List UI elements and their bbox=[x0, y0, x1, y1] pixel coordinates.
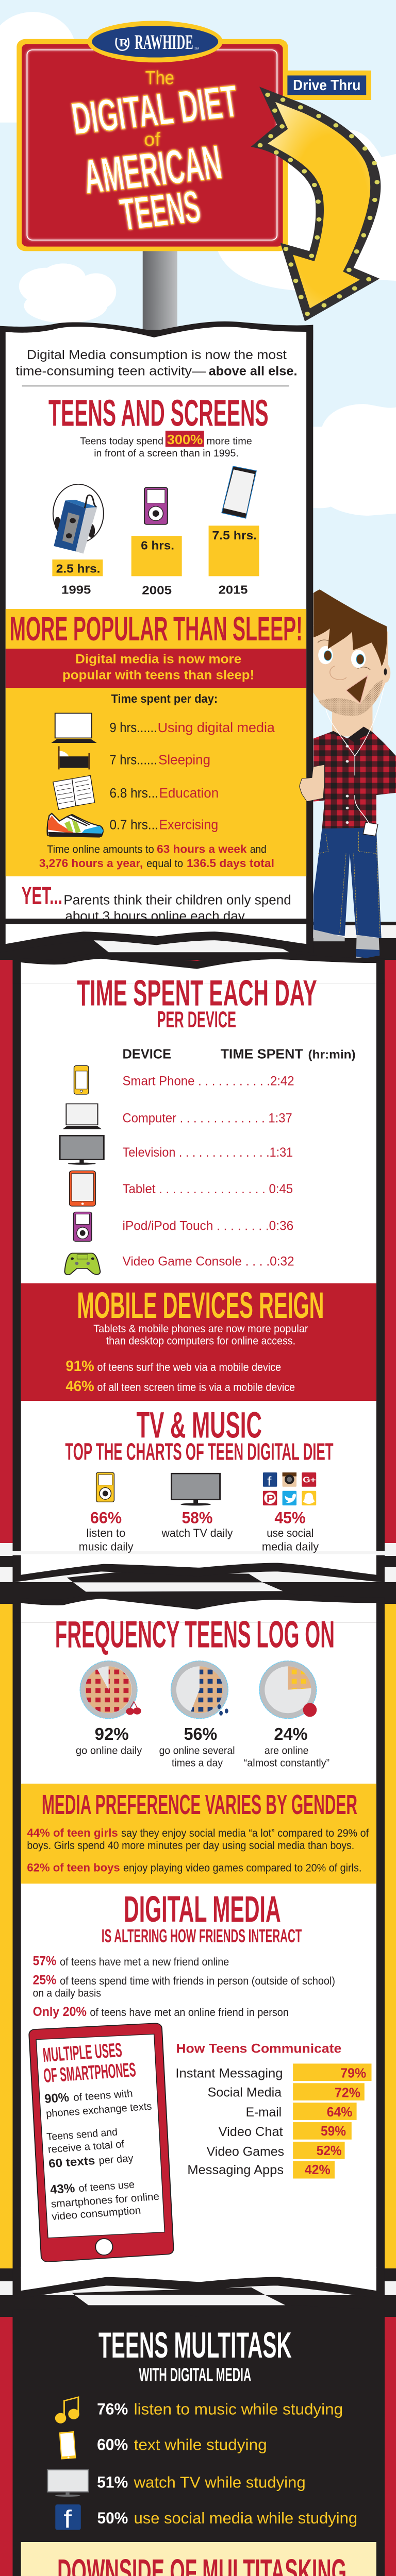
bar chart: hours of screen time bbox=[52, 526, 259, 597]
text: gender boys bbox=[27, 1861, 361, 1874]
screen time text: more time bbox=[207, 435, 252, 447]
stat: 66% listen to music bbox=[79, 1509, 134, 1553]
stat: only 20% bbox=[33, 2004, 289, 2019]
heading: time spent per day: Time spent per day: bbox=[111, 692, 218, 706]
stat: 50% social media: 50% bbox=[97, 2509, 128, 2527]
stat: 25%: 25% bbox=[33, 1972, 56, 1987]
callout: phone with multiple uses of smartphones: receive a total of bbox=[47, 2138, 125, 2155]
icon: facebook bbox=[55, 2504, 81, 2533]
row: tablet: Tablet . . . . . . . . . . . . . . . . 0:45 bbox=[123, 1181, 293, 1196]
icon: ipod bbox=[144, 487, 168, 524]
callout: phone with multiple uses of smartphones: 43% bbox=[50, 2181, 75, 2197]
stat: 58% watch tv: 58% bbox=[182, 1509, 212, 1527]
bar chart: how teens communicate: E-mail bbox=[246, 2105, 282, 2120]
row: television: Television . . . . . . . . . . . . . .1:31 bbox=[123, 1145, 293, 1160]
bar chart: hours of screen time: 6 hrs. bbox=[141, 539, 174, 552]
stat: 92% go online daily: go online daily bbox=[76, 1744, 142, 1756]
logo oval: Rawhide: R bbox=[119, 37, 128, 49]
bar chart: how teens communicate: Video Chat bbox=[219, 2124, 283, 2139]
bar chart: hours of screen time: 7.5 hrs. bbox=[212, 529, 257, 542]
row: education: 6.8 hrs... bbox=[110, 785, 158, 801]
bar chart: how teens communicate: Messaging Apps bbox=[187, 2162, 284, 2177]
bar chart: how teens communicate: 79% bbox=[340, 2065, 366, 2080]
icon: smart phone bbox=[74, 1065, 89, 1094]
callout: phone with multiple uses of smartphones bbox=[29, 2023, 173, 2262]
icon: book bbox=[53, 775, 95, 809]
text: tablets and mobile phones: than desktop computers for online access. bbox=[106, 1334, 295, 1347]
stat: 66% listen to music: 66% bbox=[90, 1509, 122, 1527]
panel: time spent each day bbox=[12, 953, 385, 1592]
table header: TIME SPENT bbox=[221, 1046, 303, 1061]
stat: 76% listen to music: 76% bbox=[97, 2400, 128, 2418]
row: exercising bbox=[110, 817, 218, 832]
stat: 91% bbox=[65, 1358, 281, 1374]
stat: 91%: 91% bbox=[65, 1358, 94, 1374]
text: time online totals: 136.5 days total bbox=[187, 857, 274, 870]
panel: teens multitask bbox=[12, 2305, 385, 2576]
text: time online totals: and bbox=[250, 843, 267, 855]
bar chart: how teens communicate bbox=[175, 2063, 371, 2179]
callout: phone with multiple uses of smartphones: phones exchange texts bbox=[45, 2100, 152, 2120]
stat: 25%: of teens spend time with friends in person (outside of school) bbox=[60, 1974, 335, 1987]
bar chart: how teens communicate: Instant Messaging bbox=[175, 2065, 283, 2080]
screen time text: Teens today spend bbox=[80, 435, 163, 447]
stat: 92% go online daily bbox=[76, 1724, 142, 1756]
text: time online totals: 63 hours a week bbox=[157, 843, 247, 856]
stat: 24% almost constantly: 24% bbox=[274, 1724, 308, 1743]
heading: how teens communicate: How Teens Communicate bbox=[176, 2041, 341, 2056]
callout: phone with multiple uses of smartphones: MULTIPLE USES bbox=[42, 2039, 123, 2066]
pie chart: 56% bbox=[171, 1661, 228, 1719]
text: digital media more popular: Digital media is now more bbox=[75, 652, 241, 666]
stat: 25% bbox=[33, 1972, 335, 1999]
panel: title sign bbox=[16, 21, 288, 251]
callout: phone with multiple uses of smartphones: Teens send and bbox=[46, 2126, 118, 2143]
icon: laptop bbox=[51, 713, 97, 743]
panel: frequency teens log on bbox=[12, 1593, 385, 2305]
text: gender girls bbox=[27, 1827, 369, 1852]
title text: AMERICAN bbox=[80, 135, 225, 204]
stat: 66% listen to music: music daily bbox=[79, 1541, 134, 1553]
icon: tablet bbox=[70, 1171, 95, 1206]
row: ipod: iPod/iPod Touch . . . . . . . .0:36 bbox=[123, 1218, 293, 1233]
stat: 45% social media: use social bbox=[267, 1528, 314, 1540]
callout: phone with multiple uses of smartphones: OF SMARTPHONES bbox=[43, 2058, 137, 2087]
icon: bed bbox=[58, 746, 90, 769]
row: computer: Computer . . . . . . . . . . . . . 1:37 bbox=[123, 1111, 292, 1125]
row: sleeping: 7 hrs...... bbox=[110, 752, 157, 767]
icon: sneaker bbox=[47, 814, 104, 838]
stat: 24% almost constantly: are online bbox=[265, 1744, 309, 1756]
text: tablets and mobile phones: Tablets & mobile phones are now more popular bbox=[93, 1323, 308, 1335]
icon: television bbox=[172, 1473, 220, 1505]
character: teen with thumbs up bbox=[299, 589, 396, 958]
stat: 58% watch tv bbox=[161, 1509, 233, 1540]
icon: social media grid: G+ bbox=[303, 1475, 316, 1484]
title text bbox=[69, 67, 241, 240]
stat: 51% tv: 51% bbox=[97, 2473, 128, 2492]
drive thru sign: Drive Thru bbox=[293, 77, 360, 94]
logo oval: Rawhide: SM bbox=[194, 47, 199, 50]
icon: music note bbox=[55, 2397, 79, 2424]
stat: only 20%: Only 20% bbox=[33, 2004, 87, 2019]
icon: tv bbox=[47, 2470, 88, 2497]
callout: phone with multiple uses of smartphones: of teens with bbox=[73, 2087, 133, 2104]
stat: 57%: of teens have met a new friend online bbox=[60, 1955, 229, 1968]
icon: facebook: f bbox=[63, 2505, 72, 2533]
stat: 24% almost constantly: “almost constantly” bbox=[244, 1757, 329, 1769]
row: exercising: 0.7 hrs... bbox=[110, 817, 158, 832]
bar chart: hours of screen time: 2.5 hrs. bbox=[56, 562, 100, 575]
table header: (hr:min) bbox=[308, 1048, 356, 1061]
stat: 51% tv: watch TV while studying bbox=[134, 2473, 306, 2491]
pie chart: 92% bbox=[80, 1661, 141, 1719]
stat: 76% listen to music: listen to music while studying bbox=[134, 2400, 343, 2418]
text: yet parents think bbox=[22, 882, 291, 924]
stat: 46% bbox=[65, 1378, 295, 1394]
panel: teens and screens bbox=[0, 321, 313, 953]
panel: time spent each day: PER DEVICE bbox=[157, 1007, 236, 1032]
bar chart: how teens communicate: 72% bbox=[335, 2084, 360, 2100]
bar chart: how teens communicate: 59% bbox=[321, 2123, 346, 2139]
icon: game controller bbox=[64, 1253, 100, 1275]
callout: phone with multiple uses of smartphones: of teens use bbox=[78, 2178, 135, 2194]
intro text: Digital Media consumption is now the most bbox=[27, 347, 287, 362]
row: sleeping: Sleeping bbox=[158, 752, 210, 767]
stat: 58% watch tv: watch TV daily bbox=[161, 1528, 233, 1540]
stat: 46%: 46% bbox=[65, 1378, 94, 1394]
stat: 60% text: text while studying bbox=[134, 2436, 267, 2453]
pie chart: 24% bbox=[259, 1661, 317, 1719]
row: smart phone: Smart Phone . . . . . . . . . . .2:42 bbox=[123, 1073, 294, 1088]
text: tablets and mobile phones bbox=[93, 1323, 308, 1347]
drive thru sign bbox=[284, 71, 371, 100]
bar chart: hours of screen time: 2005 bbox=[142, 584, 172, 597]
text: yet parents think: YET... bbox=[22, 882, 62, 910]
bar chart: how teens communicate: 64% bbox=[327, 2104, 352, 2120]
stat: 92% go online daily: 92% bbox=[95, 1724, 129, 1743]
icon: social media grid: f bbox=[267, 1473, 272, 1488]
text: digital media more popular: popular with teens than sleep! bbox=[62, 668, 254, 682]
text: digital media more popular bbox=[62, 652, 254, 682]
title text: The bbox=[145, 67, 174, 89]
logo oval: Rawhide bbox=[87, 21, 223, 62]
callout: phone with multiple uses of smartphones: 60 texts bbox=[48, 2155, 95, 2171]
screen time text: in front of a screen than in 1995. bbox=[94, 448, 239, 459]
title text: TEENS bbox=[117, 181, 204, 240]
sign pole bbox=[143, 249, 177, 333]
callout: phone with multiple uses of smartphones: video consumption bbox=[51, 2204, 141, 2223]
icon: walkman bbox=[53, 484, 104, 554]
text: time online totals: Time online amounts to bbox=[47, 843, 154, 855]
text: gender girls: 44% of teen girls bbox=[27, 1827, 118, 1840]
row: using digital media: 9 hrs...... bbox=[110, 720, 157, 735]
row: education bbox=[110, 785, 219, 801]
row: video game console: Video Game Console . . . .0:32 bbox=[123, 1253, 294, 1268]
stat: 56% several times a day bbox=[159, 1724, 235, 1769]
icon: ipod bbox=[74, 1212, 92, 1241]
table header: DEVICE bbox=[123, 1046, 171, 1061]
bar chart: how teens communicate: 52% bbox=[317, 2143, 342, 2158]
intro text: above all else. bbox=[209, 364, 297, 378]
icon: smartphone bbox=[222, 466, 256, 518]
icon: yellow ipod bbox=[96, 1472, 114, 1502]
row: sleeping bbox=[110, 752, 210, 767]
logo oval: Rawhide: RAWHIDE bbox=[135, 31, 193, 54]
stat: 56% several times a day: 56% bbox=[184, 1724, 217, 1743]
row: using digital media: Using digital media bbox=[158, 720, 275, 735]
icon: computer bbox=[62, 1104, 102, 1129]
bar chart: how teens communicate: Video Games bbox=[207, 2144, 284, 2159]
row: using digital media bbox=[110, 720, 275, 735]
icon: social media grid bbox=[263, 1472, 316, 1505]
stat: 56% several times a day: go online several bbox=[159, 1744, 235, 1756]
bar chart: how teens communicate: 42% bbox=[305, 2162, 331, 2177]
stat: 45% social media: media daily bbox=[262, 1541, 319, 1553]
stat: 45% social media bbox=[262, 1509, 319, 1553]
callout: phone with multiple uses of smartphones: smartphones for online bbox=[51, 2190, 160, 2210]
intro text: time-consuming teen activity— bbox=[15, 364, 206, 378]
icon: phone bbox=[59, 2431, 76, 2460]
stat: 66% listen to music: listen to bbox=[87, 1528, 125, 1540]
text: time online totals: 3,276 hours a year, bbox=[39, 857, 143, 870]
table header bbox=[123, 1046, 356, 1061]
screen time text bbox=[80, 431, 252, 459]
stat: 24% almost constantly bbox=[244, 1724, 329, 1769]
icon: social media grid: P bbox=[267, 1493, 275, 1505]
row: education: Education bbox=[159, 785, 219, 801]
text: gender boys: 62% of teen boys bbox=[27, 1862, 120, 1874]
stat: only 20%: of teens have met an online friend in person bbox=[90, 2006, 289, 2019]
stat: 57% bbox=[33, 1953, 229, 1968]
stat: 56% several times a day: times a day bbox=[172, 1757, 223, 1769]
icon: television bbox=[60, 1136, 104, 1165]
stat: 25%: on a daily basis bbox=[33, 1987, 101, 1999]
stat: 50% social media: use social media while studying bbox=[134, 2509, 357, 2527]
stat: 57%: 57% bbox=[33, 1953, 56, 1968]
text: yet parents think: about 3 hours online each day. bbox=[65, 908, 248, 924]
title text: of bbox=[144, 129, 161, 150]
callout: phone with multiple uses of smartphones: per day bbox=[98, 2152, 134, 2166]
bar chart: how teens communicate: Social Media bbox=[208, 2084, 282, 2099]
bar chart: hours of screen time: 1995 bbox=[61, 583, 91, 597]
text: time online totals bbox=[39, 843, 274, 870]
text: time online totals: equal to bbox=[146, 857, 183, 869]
heading: tv and music: TV & MUSIC bbox=[136, 1405, 262, 1446]
stat: 46%: of all teen screen time is via a mobile device bbox=[97, 1381, 295, 1394]
arrow: marquee bbox=[251, 87, 381, 321]
panel: teens multitask: WITH DIGITAL MEDIA bbox=[139, 2365, 251, 2385]
icon: thumbs up hand bbox=[299, 765, 324, 802]
screen time text: 300% bbox=[167, 432, 203, 447]
stat: 91%: of teens surf the web via a mobile device bbox=[97, 1362, 281, 1374]
intro text bbox=[15, 347, 297, 378]
text: yet parents think: Parents think their children only spend bbox=[63, 892, 291, 907]
bar chart: hours of screen time: 2015 bbox=[219, 583, 248, 597]
stat: 60% text: 60% bbox=[97, 2436, 128, 2454]
row: exercising: Exercising bbox=[159, 817, 218, 832]
clouds bbox=[0, 12, 396, 516]
stat: 45% social media: 45% bbox=[274, 1509, 306, 1527]
callout: phone with multiple uses of smartphones: 90% bbox=[44, 2090, 70, 2106]
